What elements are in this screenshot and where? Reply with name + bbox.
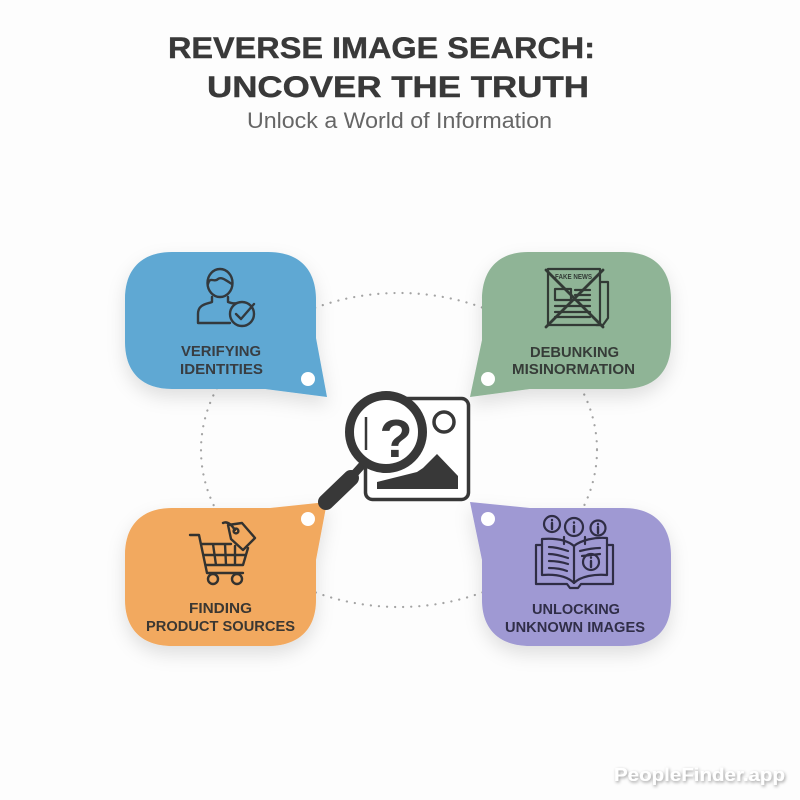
title <box>168 32 595 104</box>
dotted connector ring <box>201 293 597 607</box>
label: unlocking unknown images: UNKNOWN IMAGES <box>505 620 645 636</box>
marker dot <box>481 512 495 526</box>
icon: crossed-out newspaper <box>546 269 608 327</box>
icon: crossed-out newspaper: FAKE NEWS <box>555 274 592 281</box>
label: finding product sources: FINDING <box>189 601 252 617</box>
image frame <box>366 398 468 500</box>
icon: shopping cart with tag <box>190 522 255 584</box>
title: UNCOVER THE TRUTH <box>207 71 589 104</box>
panel: finding product sources <box>125 502 327 646</box>
label: verifying identities: VERIFYING <box>181 344 261 360</box>
icon: open book with info symbols <box>536 516 613 588</box>
magnifier neck <box>348 462 365 481</box>
icon: person with check <box>198 269 254 326</box>
mountains <box>377 454 458 489</box>
label: debunking misinformation: MISINORMATION <box>512 362 635 378</box>
label: verifying identities <box>180 344 263 378</box>
panel: unlocking unknown images <box>470 502 671 646</box>
icon: central image with magnifier <box>326 396 468 502</box>
marker dot <box>301 372 315 386</box>
sun <box>434 412 454 432</box>
frame edge through lens <box>365 417 367 450</box>
label: finding product sources <box>146 601 295 635</box>
magnifier lens <box>350 396 422 468</box>
marker dot <box>481 372 495 386</box>
label: debunking misinformation: DEBUNKING <box>530 345 619 361</box>
label: unlocking unknown images <box>505 602 645 636</box>
panel: verifying identities <box>125 252 327 397</box>
magnifier handle <box>326 478 351 502</box>
question mark: ? <box>380 409 412 469</box>
marker dot <box>301 512 315 526</box>
subtitle: Unlock a World of Information <box>247 108 552 133</box>
title: REVERSE IMAGE SEARCH: <box>168 32 595 65</box>
label: verifying identities: IDENTITIES <box>180 362 263 378</box>
label: finding product sources: PRODUCT SOURCES <box>146 619 295 635</box>
label: debunking misinformation <box>512 345 635 378</box>
label: unlocking unknown images: UNLOCKING <box>532 602 620 618</box>
watermark: PeopleFinder.app <box>614 764 785 785</box>
panel: debunking misinformation <box>470 252 671 397</box>
